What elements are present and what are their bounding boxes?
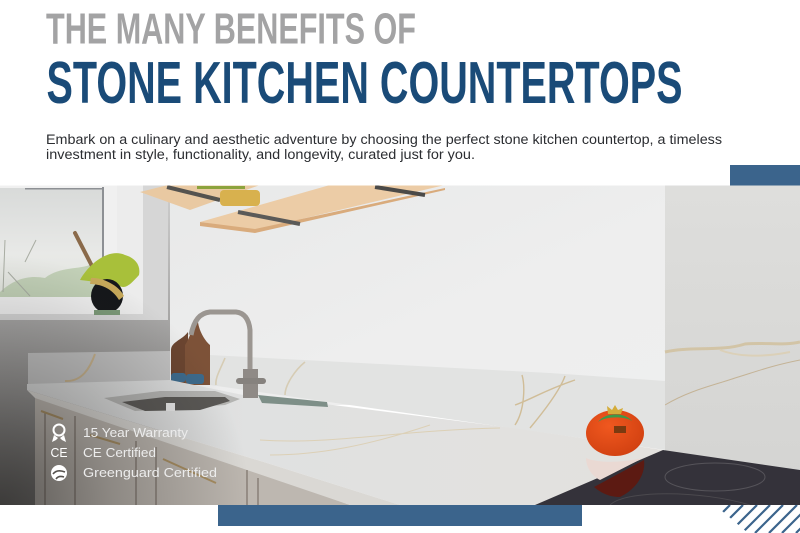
sink [104, 391, 240, 411]
kitchen photo [0, 185, 800, 505]
backsplash left [28, 351, 170, 384]
intro paragraph: investment in style, functionality, and longevity, curated just for you. [46, 147, 475, 162]
warranty label: 15 Year Warranty [83, 426, 189, 440]
diagonal stripes [722, 505, 800, 533]
right marble wall [665, 185, 800, 485]
tile sample [258, 395, 328, 407]
marble veins on counter [260, 425, 500, 455]
wooden shelves [140, 185, 445, 233]
marble backsplash [210, 355, 665, 450]
soft shadow overlay [0, 274, 226, 505]
icon: greenguard [51, 465, 67, 481]
left wall and window recess [0, 185, 170, 505]
cutting boards [171, 322, 210, 385]
main wall [168, 185, 666, 405]
faucet [191, 312, 266, 398]
certifications list [50, 424, 217, 481]
greenguard label: Greenguard Certified [83, 466, 217, 480]
accent block: bottom centre [218, 505, 582, 526]
counter edge and cabinets [27, 390, 400, 505]
icon: warranty ribbon [52, 424, 66, 442]
tomato ornament [586, 405, 644, 497]
countertop [27, 380, 663, 505]
cooktop [535, 450, 800, 505]
CE label: CE Certified [83, 446, 156, 460]
title: the many benefits of: THE MANY BENEFITS OF [46, 4, 416, 54]
plant and head vase [75, 233, 139, 315]
accent block: top right [730, 165, 800, 186]
icon: CE mark: CE [50, 445, 68, 460]
intro paragraph: Embark on a culinary and aesthetic adventure by choosing the perfect stone kitchen countertop, a timeless [46, 132, 722, 147]
intro paragraph [46, 132, 722, 162]
